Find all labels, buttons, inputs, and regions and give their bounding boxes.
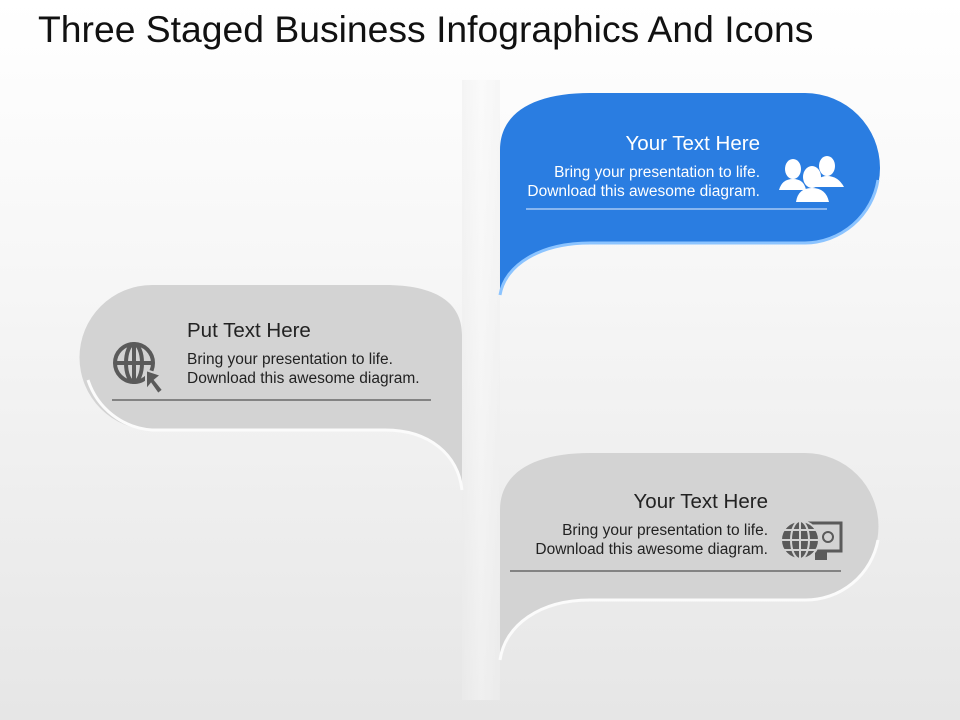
icon: people group bbox=[779, 156, 844, 202]
text: left panel: Download this awesome diagram. bbox=[187, 370, 420, 387]
icon: globe and monitor bbox=[781, 521, 841, 560]
text: left panel: Put Text Here bbox=[187, 319, 311, 342]
text: bottom panel: Bring your presentation to life. bbox=[562, 522, 768, 539]
panel: gray bottom right bbox=[500, 453, 878, 660]
panel: gray left bbox=[79, 285, 462, 490]
text: blue panel: Download this awesome diagram. bbox=[527, 183, 760, 200]
text: bottom panel bbox=[535, 490, 768, 558]
text: left panel bbox=[187, 319, 420, 387]
text: bottom panel: Your Text Here bbox=[634, 490, 768, 513]
text: blue panel: Your Text Here bbox=[626, 132, 760, 155]
icon: globe with cursor bbox=[115, 344, 163, 394]
text: left panel: Bring your presentation to life. bbox=[187, 351, 393, 368]
panel: blue top right bbox=[500, 93, 880, 295]
text: bottom panel: Download this awesome diagram. bbox=[535, 541, 768, 558]
text: blue panel bbox=[527, 132, 760, 200]
title: Three Staged Business Infographics And Icons bbox=[38, 8, 813, 50]
text: blue panel: Bring your presentation to life. bbox=[554, 164, 760, 181]
